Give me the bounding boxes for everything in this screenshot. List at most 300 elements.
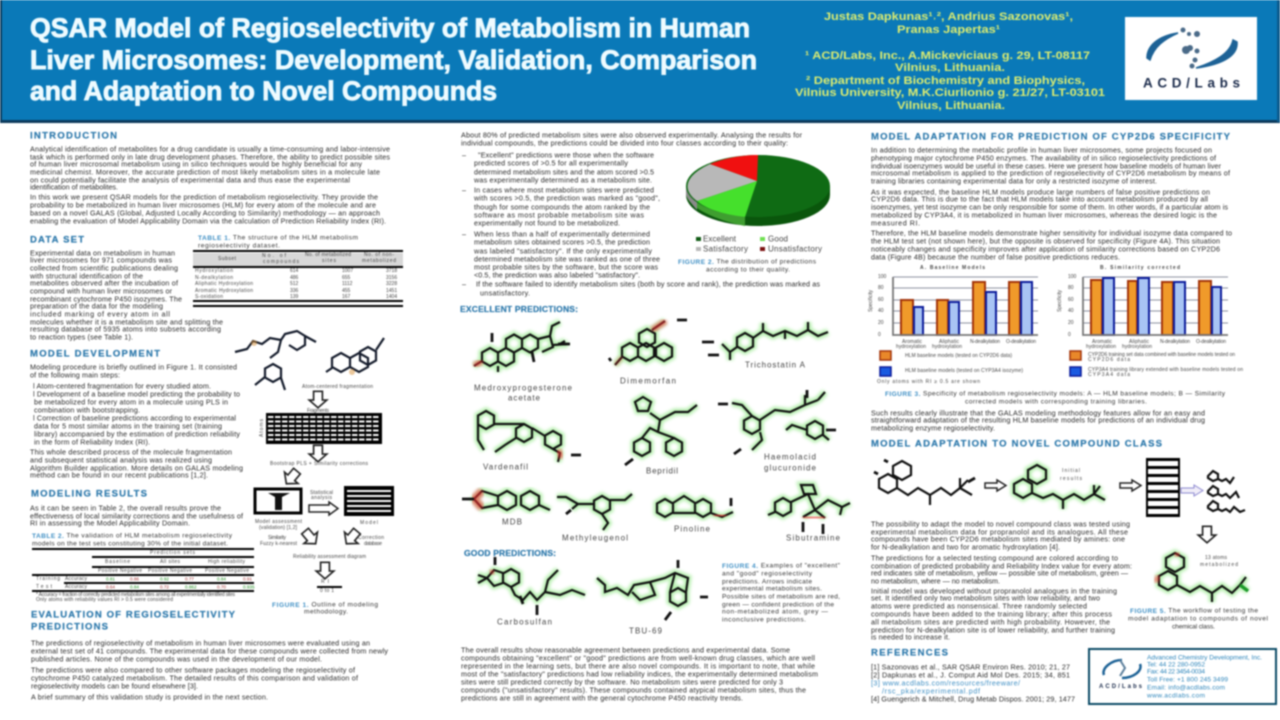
text: model development: l Development of a baseline model predicting the probability to [33,390,240,398]
contact details: Fax: 44 22 3454-0034 [1147,668,1205,676]
chart B axis labels: 80 [1068,285,1074,291]
table 1 content: No. of non- [364,252,394,258]
molecule: final prediction: 13 atoms [1205,555,1228,561]
title: QSAR Model of Regioselectivity of Metabolism in Human [30,13,750,43]
table 2 content: * Accuracy = fraction of correctly predicted metabolism sites among all experimentally identified sites [36,592,236,598]
figure 2 caption: according to their quality. [706,266,790,274]
molecule: dimemorfan [609,320,687,386]
arrow to statistics table: analysis [311,495,332,501]
reference list [871,662,1075,704]
text: data set: compound with human liver microsomes or [30,286,173,296]
table 2 content: 0.77 [185,576,194,582]
chart A legend: Only atoms with RI ≥ 0.5 are shown [877,379,980,385]
text: adaptation conclusion: Such results clearly illustrate that the GALAS modeling methodology features allow for an easy and [871,408,1205,418]
text: model development: data for 5 most similar atoms in the training set (training [34,422,222,430]
molecule: methyleugenol: Methyleugenol [562,534,628,542]
chart B legend: CYP3A4 data [1088,372,1130,378]
pie top [686,155,830,217]
added compounds [1208,471,1245,512]
chart A axis labels: Aliphatic [939,339,960,345]
figure 4 caption: Possible sites of metabolism are red, [722,594,840,600]
contact details: Toll Free: +1 800 245 3499 [1147,676,1228,684]
title: and Adaptation to Novel Compounds [30,76,497,106]
text: bootstrap and PLS: Bootstrap PLS + Similarity corrections [270,461,368,467]
bar chart A: baseline models [868,265,1038,385]
table 2 caption [32,532,233,548]
text: novel compound adaptation: compounds have been CYP2D6 metabolism sites mediated by amines: one [871,534,1125,544]
list: prediction classes: unsatisfactory. [480,288,530,298]
text: novel compound adaptation [871,520,1132,642]
table 2 content: 0.92 [160,576,169,582]
slice: unsatisfactory [710,155,758,181]
text: novel compound adaptation: The possibility to adapt the model to novel compound class was tested using [871,520,1130,528]
text: model development: Modeling procedure is briefly outlined in Figure 1. It consisted [30,362,237,372]
chart B axis labels: N-dealkylation [1160,339,1190,345]
figure 1 caption: FIGURE 1. Outline of modeling [272,602,378,608]
text: model development: Algorithm Builder application. More details on GALAS modeling [30,464,243,472]
list: prediction classes: software as most probable metabolism site was [474,210,644,220]
list: prediction classes: though for some compounds the atom ranked by the [474,202,650,212]
title [30,13,757,106]
training library box [1146,458,1180,517]
figure 5 caption: FIGURE 5. The workflow of testing the [1130,608,1258,614]
list: prediction classes: experimentally not found to be metabolized. [474,218,620,228]
table 1 content: Aliphatic Hydroxylation [195,281,253,287]
table 2 content: 0.64 [106,584,115,590]
table 1 content: Subset [218,256,237,262]
contact details: www.acdlabs.com [1146,692,1206,700]
pie legend: Unsatisfactory [768,244,822,254]
text: data set: to reaction types (see Table 1). [30,332,133,342]
contact details: Advanced Chemistry Development, Inc. [1147,654,1262,662]
molecule: trichostatin A [702,322,828,370]
figure 4 caption: FIGURE 4. Examples of "excellent" [722,562,841,570]
contact box [1089,649,1276,704]
table 1 content: 1007 [342,268,353,274]
authors and affiliations: Pranas Japertas¹ [897,24,1000,36]
slice: satisfactory [688,164,757,201]
table 2 content: 0.935 [243,584,255,590]
text: data set: resulting database of 5935 atoms into subsets according [30,324,221,334]
text: introduction: of human liver microsomal metabolism using in silico techniques would be highly beneficial for any [30,160,362,168]
chart B axis labels: 60 [1068,297,1074,303]
text: data set: Experimental data on metabolism in human [30,248,175,258]
pie legend: Good [768,234,788,244]
chart A axis labels: hydroxylation [896,344,926,350]
text: overall results [461,646,818,702]
text: introduction [30,144,390,226]
arrow down [309,391,327,408]
section: model development [30,348,243,480]
text: evaluation [31,638,388,702]
text: CYP2D6 specificity: metabolized by CYP3A4, it is metabolized in human liver microsomes, whereas the desired logic is the [871,210,1217,220]
arrows to reliability index: Similarity [268,535,286,541]
table 1 content: 3228 [386,281,397,287]
figure 4 caption [722,562,841,624]
text: data set: collected from scientific publications dealing [30,264,178,272]
table 1 content: 486 [290,275,299,281]
heading: novel compound class: MODEL ADAPTATION TO NOVEL COMPOUND CLASS [871,438,1162,450]
chart B legend: CYP2D6 training set data combined with baseline models tested on [1088,352,1235,358]
chart A legend: HLM baseline models (tested on CYP2D6 data) [905,353,1012,359]
table 1 content: compounds [263,259,300,265]
text: novel compound adaptation: all metabolism sites are predicted with high probability. However, the [871,618,1110,626]
section: modeling results [30,488,243,528]
section: adaptation for CYP2D6 [871,132,1232,262]
figure 1 caption: methodology. [304,608,348,616]
chart A axis labels: 0 [878,332,881,338]
text: prediction overview: About 80% of predicted metabolism sites were also observed experimentally. Analysing the results for [461,130,803,140]
molecule: medroxyprogesterone acetate [474,322,573,402]
molecule: propranolol [874,460,975,505]
table 2 content: Positive Negative [98,568,142,574]
slice: good [697,181,757,217]
chart B title: B. Similarity corrected [1100,265,1180,271]
section: introduction [30,130,390,226]
figure 4 caption: green — confident prediction of the [722,602,834,608]
reference list: [4] Guengerich & Mitchell, Drug Metab Dispos. 2001; 29, 1477 [871,694,1075,704]
figure 4 caption: inconclusive predictions. [722,616,806,624]
section: data set [29,234,223,342]
molecule: haemolacid glucuronide: glucuronide [764,464,817,472]
molecule: dimemorfan: Dimemorfan [620,376,676,386]
chart A axis labels: hydroxylation [932,344,962,350]
figure 5 caption [1128,608,1269,630]
chart A legend [877,351,1023,385]
arrow down [309,445,327,462]
text: CYP2D6 specificity: As it was expected, the baseline HLM models produce large numbers of false positive predictions on [871,188,1210,196]
molecule: haemolacid glucuronide [718,390,836,472]
table 1 content: 1451 [386,288,397,294]
table 2 content: 0.70 [217,584,226,590]
table 2 content: Positive Negative [205,568,249,574]
text: evaluation: cytochrome P450 catalyzed metabolism. The detailed results of this comparison and validation of [31,674,358,682]
text: CYP2D6 specificity: In addition to determining the metabolic profile in human liver microsomes, some projects focused on [871,146,1212,154]
chart B axis labels: Aromatic [1092,339,1112,345]
molecule: bepridil [625,397,697,476]
chart A axis labels: 20 [878,320,884,326]
molecule: vardenafil [478,411,581,472]
molecule: sibutramine: Sibutramine [786,534,841,542]
baseline model box: (validation) [1,2] [259,525,298,531]
chart B axis labels: 0 [1068,332,1071,338]
table 1 content: 167 [342,294,351,300]
fragment matrix: Fragments [307,408,330,414]
table 1 content: Hydroxylation [195,268,233,274]
chart A axis labels: Aromatic [902,339,922,345]
text: model development: l Correction of baseline predictions according to experimental [33,414,236,422]
figure 4 caption: predictions. Arrows indicate [722,578,812,586]
arrows to reliability index: database [364,541,382,547]
table 2 content: Positive Negative [148,568,192,574]
text: evaluation: A brief summary of this validation study is provided in the next section. [31,692,268,702]
text: novel compound adaptation: red indicates site of metabolism, yellow — possible site of metabolism, green — [871,568,1129,578]
text: CYP2D6 specificity: microsomal metabolism is applied to the prediction of regioselectivity of CYP2D6 metabolism by means of [871,168,1230,178]
fragment matrix [259,408,382,444]
reference list: /rsc_pka/experimental.pdf [882,686,980,696]
list: prediction classes: determined metabolism site was ranked as one of three [474,254,660,264]
chart B axis labels: 100 [1068,274,1077,280]
chart B legend: CYP3A4 training library extended with baseline models tested on [1088,367,1243,373]
contact details: Tel: 44 22 280-0952 [1147,662,1205,668]
table 2 content: 0.862 [185,584,197,590]
text: overall results: predictions are still in agreement with the general cytochrome P450 reactivity trends. [461,694,743,702]
arrows to reliability index: Correction [358,535,384,541]
chart A axis labels: 100 [878,274,887,280]
arrow down [316,562,334,579]
figure 1 caption [272,602,378,616]
reference list: [2] Dapkunas et al., J. Comput Aid Mol Des. 2015; 34, 851 [871,670,1070,680]
text: adaptation conclusion: metabolizing enzyme regioselectivity. [871,424,995,432]
heading: CYP2D6 specificity: MODEL ADAPTATION FOR PREDICTION OF CYP2D6 SPECIFICITY [871,132,1231,142]
statistics table icon [344,486,394,526]
formula: reliability index: RI [321,579,329,585]
list: prediction classes: was labeled "satisfactory". If the only experimentally [473,246,652,256]
text: modeling results [30,504,243,528]
chart B axis labels: 40 [1068,308,1074,314]
molecule: sibutramine [768,485,850,542]
text: data set: recombinant cytochrome P450 isozymes. The [30,294,182,304]
text: CYP2D6 specificity: Therefore, the HLM baseline models demonstrate higher sensitivity for individual isozyme data compared to [871,228,1232,238]
chart B axis labels: hydroxylation [1122,344,1152,350]
text: adaptation conclusion: straightforward adaptation of the resulting HLM baseline models for predictions of an individual drug [871,416,1205,424]
pie legend: Excellent [703,234,737,244]
arrow to statistics table: Statistical [310,490,333,496]
figure 1: input molecules [235,331,384,390]
text: data set: metabolites observed after the incubation of [30,278,178,288]
list: prediction classes: with scores >0.5, the prediction was marked as "good", [473,194,660,202]
text: modeling results: RI in assessing the Model Applicability Domain. [30,518,190,528]
figure 1: modeling workflow [235,331,394,616]
text: introduction: In this work we present QSAR models for the prediction of metabolism regioselectivity. They provide the [30,192,378,202]
figure 4 caption: experimental metabolism sites. [722,586,822,592]
text: novel compound adaptation: compounds have been added to the training library; after this process [871,610,1112,618]
figure 1: input molecules: Atom-centered fragmentation [302,384,373,390]
list: prediction classes: metabolism sites obtained scores >0.5, the prediction [474,238,650,246]
table 2 content: Only atoms with reliability values RI > 0.5 were considered [36,597,173,603]
molecule: vardenafil: Vardenafil [483,462,528,472]
molecule: methyleugenol [557,494,632,542]
text: modeling results: As it can be seen in Table 2, the overall results prove the [30,504,221,512]
molecule: medroxyprogesterone acetate: Medroxyprogesterone [474,384,573,392]
arrow to statistics table [309,490,338,515]
molecule: bepridil: Bepridil [646,466,678,476]
list: prediction classes: was experimentally determined as a metabolism site. [473,176,652,184]
table 2 content [36,550,255,603]
table 1 content: 3156 [386,275,397,281]
table 1 caption: regioselectivity dataset. [198,242,280,250]
molecule: TBU-69 [597,560,708,636]
pie legend: Satisfactory [703,244,748,254]
text: CYP2D6 specificity: isoenzymes, yet test isozyme can be only responsible for some of them. In other words, if a particular atom is [871,202,1228,212]
heading: modeling results: MODELING RESULTS [31,488,147,500]
statistics table icon: Model [360,520,378,526]
arrow to baseline model [280,465,304,489]
text: introduction: on could potentially facilitate the analysis of experimental data and thus ease the experimental [30,176,350,184]
table 1 content [195,252,397,300]
chart A axis labels: O-dealkylation [1006,339,1036,345]
table 1 content: 1404 [386,294,397,300]
text: introduction: medicinal chemist. Moreover, the accurate prediction of most likely metabolism sites in a molecule late [30,168,380,176]
table 2 content: 0.72 [160,584,169,590]
table 1 content: N-dealkylation [195,275,233,281]
text: introduction: identification of metabolites. [30,182,118,192]
list: prediction classes: When less than a half of experimentally determined [474,230,650,238]
text: novel compound adaptation: experimental metabolism data for propranolol and its analogues. All these [871,528,1128,536]
arrow down [1198,526,1216,543]
arrow right: training [1181,485,1203,496]
chart B axis labels: Aliphatic [1129,339,1150,345]
text: overall results: compounds obtaining "excellent" or "good" predictions are from well-known drug classes, which are well [461,654,815,662]
table 1 caption [198,234,358,250]
text: model development: combination with bootstrapping. [34,406,140,414]
chart A axis labels [868,274,1036,350]
heading: model development: MODEL DEVELOPMENT [30,348,160,360]
authors and affiliations: ¹ ACD/Labs, Inc., A.Mickeviciaus g. 29, LT-08117 [805,50,1090,62]
heading: good predictions: GOOD PREDICTIONS: [464,548,556,558]
text: novel compound adaptation: for N-dealkylation and two for aromatic hydroxylation [4]. [871,542,1060,552]
chart A title: A. Baseline Models [920,265,985,271]
heading: data set: DATA SET [30,234,84,246]
text: evaluation: published articles. None of the compounds was used in the development of our model. [31,654,322,664]
table 2 content: Accuracy [65,584,88,590]
chart B axis labels: hydroxylation [1086,344,1116,350]
text: CYP2D6 specificity: individual isoenzymes would be useful in these cases. Here we present how baseline models of human liver [871,162,1222,170]
formula: reliability index [317,579,342,594]
logo: ACD/Labs: ACD/Labs [1143,76,1240,90]
text: novel compound adaptation: prediction for N-dealkylation site is of lower reliability, and further training [871,626,1115,634]
section: prediction classes [461,130,820,298]
text: novel compound adaptation: atoms were predicted as nonsensical. Three randomly selected [871,602,1087,610]
heading: evaluation: PREDICTIONS [31,622,108,632]
text: data set: molecules whether it is a metabolism site and splitting the [30,318,223,326]
text: model applicability: Reliability assessment diagram [293,554,366,560]
text: introduction: Analytical identification of metabolites for a drug candidate is usually a time-consuming and labor-intensive [30,144,390,154]
text: CYP2D6 specificity: phenotyping major cytochrome P450 enzymes. The availability of in silico regioselectivity predictions of [871,154,1216,162]
table 1 content: No. of [262,253,287,259]
text: novel compound adaptation: Initial model was developed without propranolol analogues in the training [871,586,1117,596]
text: model development [30,362,243,480]
text: overall results: most of the "satisfactory" predictions had low reliability indices, the experimentally determined metabolism [461,670,818,678]
table 1 content: 614 [290,268,299,274]
chart A axis labels: 80 [878,285,884,291]
molecule: MDB [462,491,550,526]
text: model development: be metabolized for every atom in a molecule using PLS in [34,398,228,406]
table 1 content: Aromatic Hydroxylation [195,288,253,294]
table 1 content: 455 [342,288,351,294]
table 1 content: sites [322,258,336,264]
text: modeling results: effectiveness of local similarity corrections and the usefulness of [30,512,243,520]
arrows to reliability index: Fuzzy k-nearest [260,541,298,547]
contact logo: ACD/Labs [1099,684,1143,690]
text: overall results: The overall results show reasonable agreement between predictions and experimental data. Some [461,646,790,654]
figure 4 caption: and "good" regioselectivity [722,570,813,578]
reference list: [3] www.acdlabs.com/resources/freeware/ [871,678,1020,688]
table 1 content: 139 [290,294,299,300]
table 1 content: 1112 [342,281,353,287]
molecule: pinoline: Pinoline [674,524,711,534]
table 1 content: 512 [290,281,299,287]
molecule: carbosulfan: Carbosulfan [497,618,552,626]
molecule: pinoline [657,496,733,534]
text: overall results: compounds ("unsatisfactory" results). These compounds contained atypical metabolism sites, thus the [461,686,806,694]
text: CYP2D6 specificity: CYP2D6 data. This is due to the fact that HLM models take into account metabolism produced by all [871,194,1208,204]
list: prediction classes: predicted scores of >0.5 for all experimentally [474,158,628,168]
text: novel compound adaptation: combination of predicted probability and Reliability Index value for every atom: [871,562,1132,570]
table 1 content: metabolized [362,258,396,264]
figure 2 caption: FIGURE 2. The distribution of predictions [678,258,817,266]
molecule: initial prediction: results [1060,476,1082,482]
figure 2 caption [678,258,817,274]
list: prediction classes: most probable sites by the software, but the score was [474,262,658,272]
fragment matrix: Atoms [259,418,265,437]
arrows to reliability index [260,525,384,549]
table 2 content: High reliability [208,559,246,565]
table 2 caption: models on the test sets constituting 30% of the initial dataset. [32,540,228,548]
molecule: haemolacid glucuronide: Haemolacid [764,452,816,462]
text: introduction: enabling the evaluation of Model Applicability Domain via the calculation of Prediction Reliability Index (RI). [30,216,386,226]
molecule: MDB: MDB [502,518,522,526]
text: data set: liver microsomes for 971 compounds was [30,256,172,264]
text: adaptation conclusion [871,408,1205,432]
table 2 content: 0.81 [106,576,115,582]
text: model development: and subsequent statistical analysis was realized using [30,456,212,464]
pie side [686,186,830,226]
chart B axis labels: O-dealkylation [1196,339,1226,345]
table 2 content: 0.86 [130,576,139,582]
molecule: trichostatin A: Trichostatin A [745,360,806,370]
chart A plot [893,277,1038,335]
authors and affiliations: Vilnius, Lithuania. [897,100,1005,112]
text: evaluation: external test set of 41 compounds. The experimental data for these compounds were collected from newly [31,646,388,656]
text: CYP2D6 specificity: data (Figure 4B) because the number of false positive predictions reduces. [871,252,1120,262]
table 2 content: Baseline [105,559,130,565]
table 2 content: Accuracy [65,576,88,582]
text: introduction: task which is performed only in late drug development phases. Therefore, the ability to predict possible sites [30,152,390,162]
text: data set: with structural identification of the [29,272,143,280]
table 2 content: 0.84 [130,584,139,590]
table 1 content: No. of metabolized [305,252,351,258]
table 2 content: 0.91 [243,576,252,582]
chart B axis labels: 20 [1068,320,1074,326]
chart A axis labels: Specificity [868,290,874,312]
figure 3 caption: FIGURE 3. Specificity of metabolism regioselectivity models: A — HLM baseline models; B — Similarity [885,390,1226,398]
table 2 caption: TABLE 2. The validation of HLM metabolism regioselectivity [32,532,233,540]
text: prediction overview [461,130,803,148]
text: model development: l Atom-centered fragmentation for every studied atom. [33,382,211,390]
figure 3 caption [885,390,1226,406]
chart B legend [1070,351,1243,378]
chart A axis labels: 40 [878,308,884,314]
text: prediction overview: individual compounds, the predictions could be divided into four classes according to their quality: [461,138,788,148]
heading: references: REFERENCES [871,648,948,658]
text: novel compound adaptation: The predictions for a selected testing compound are colored according to [871,554,1118,562]
text: novel compound adaptation: set. It identified only two metabolism sites with low reliability, and two [871,594,1100,602]
list: prediction classes: – [462,280,466,288]
table 1 content: 655 [342,275,351,281]
heading: evaluation [31,610,236,632]
table 2 content: Training [36,576,60,582]
contact logo [1099,660,1143,690]
text: model development: method can be found in our recent publications [1,2]. [30,470,208,480]
table 1 caption: TABLE 1. The structure of the HLM metabolism [198,234,358,242]
table 2 content: All sites [160,559,180,565]
text: model development: of the following main steps: [30,370,120,380]
table 2 content: Prediction sets [150,550,196,556]
figure 5 caption: model adaptation to compounds of novel [1128,616,1269,622]
authors and affiliations: Justas Dapkunas¹˒², Andrius Sazonovas¹, [824,11,1073,23]
text: CYP2D6 specificity: the HLM test set (not shown here), but the opposite is observed for specificity (Figure 4A). This situation [871,236,1220,246]
